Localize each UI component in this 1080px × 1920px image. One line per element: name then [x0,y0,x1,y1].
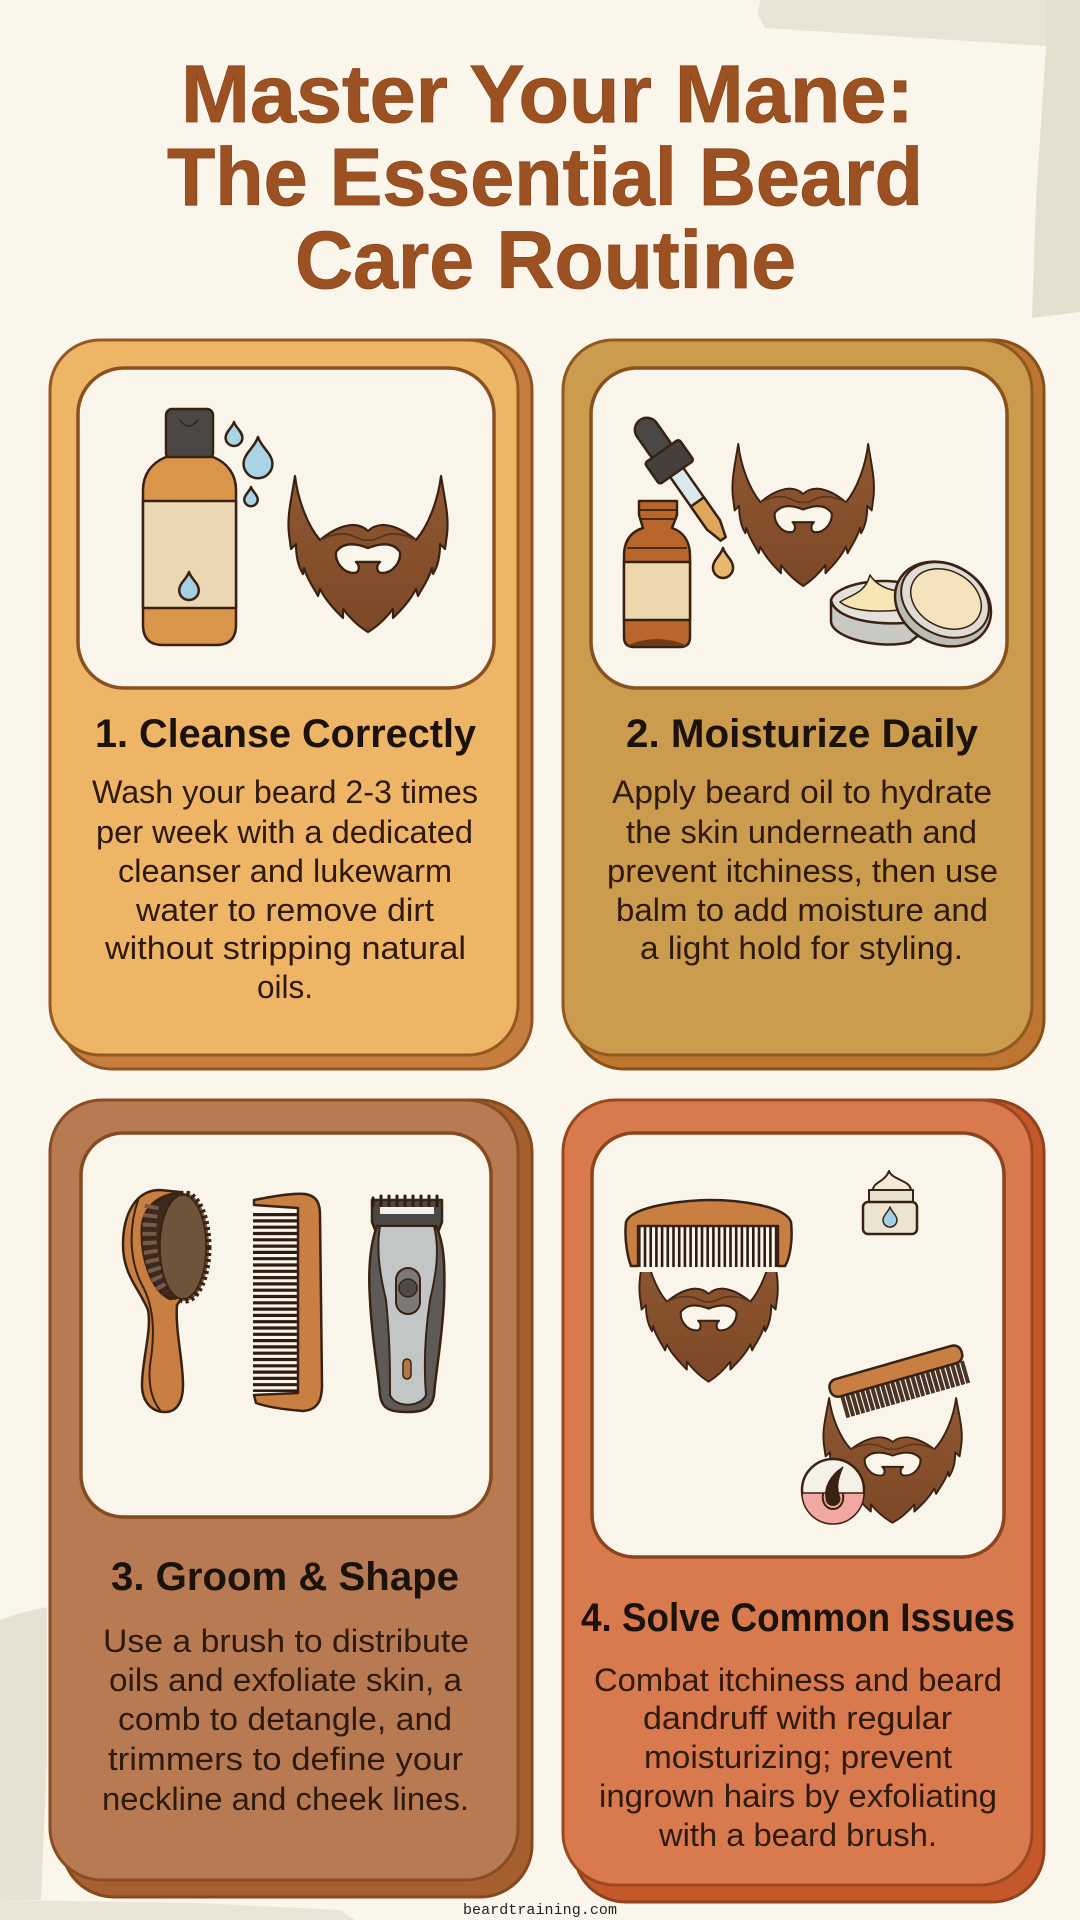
panel: 3 Groom and Shape [50,1100,532,1897]
title: Care Routine [295,215,796,306]
footer source: beardtraining.com [463,1902,617,1919]
title [167,49,923,306]
icon: water drops [226,422,272,506]
card 2 body text: the skin underneath and [626,814,977,850]
card 4 body text: Combat itchiness and beard [594,1662,1002,1698]
card 1 body text: oils. [257,969,313,1005]
card 2 body text [607,774,998,966]
card 3 body text [102,1623,469,1817]
card 1 body text: without stripping natural [104,930,466,966]
icon: trimmer [369,1196,444,1412]
icon: beard [288,476,448,632]
card 1 body text: water to remove dirt [135,892,434,928]
icon: beard with brush [823,1398,962,1523]
card 2 body text: balm to add moisture and [616,892,988,928]
card 3 body text: neckline and cheek lines. [102,1781,469,1817]
card 1 background [50,340,532,1069]
title: Master Your Mane: [181,49,914,140]
card 2 body text: a light hold for styling. [640,930,963,966]
icon: hair follicle badge [802,1459,864,1524]
card 2 illustration panel [591,368,1007,688]
card 1 body text: per week with a dedicated [96,814,473,850]
card 3 body text: oils and exfoliate skin, a [109,1662,462,1698]
panel: 2 Moisturize Daily [563,340,1044,1069]
decorative tape: top right [758,0,1080,318]
card 2 body text: prevent itchiness, then use [607,853,998,889]
icon: beard brush [828,1343,968,1409]
card 2 background [563,340,1044,1069]
icon: dropper [623,408,740,551]
card 4 body text: ingrown hairs by exfoliating [599,1778,997,1814]
panel: 1 Cleanse Correctly [50,340,532,1069]
card 1 body text [92,774,478,1005]
card 3 body text: comb to detangle, and [118,1701,452,1737]
icon: balm tin [831,545,1006,663]
card 2 body text: Apply beard oil to hydrate [612,774,992,810]
card 3 background [50,1100,532,1897]
card 1 body text: cleanser and lukewarm [118,853,452,889]
icon: comb [625,1200,792,1266]
card 2 heading: 2. Moisturize Daily [626,712,979,756]
icon: beard brush [123,1190,209,1412]
icon: beard under comb [636,1240,781,1382]
title: The Essential Beard [167,132,923,223]
card 4 body text [594,1662,1002,1853]
icon: beard [732,444,874,586]
card 3 illustration panel [81,1133,491,1517]
icon: oil bottle [624,501,690,647]
icon: shampoo bottle [143,409,236,645]
icon: oil drop [713,548,733,578]
card 1 body text: Wash your beard 2-3 times [92,774,478,810]
card 3 body text: trimmers to define your [108,1741,463,1777]
card 4 background [563,1100,1044,1902]
card 4 body text: dandruff with regular [643,1700,952,1736]
card 3 body text: Use a brush to distribute [103,1623,469,1659]
card 4 body text: with a beard brush. [658,1817,937,1853]
card 1 illustration panel [78,368,494,688]
card 4 body text: moisturizing; prevent [644,1739,952,1775]
card 4 heading: 4. Solve Common Issues [581,1596,1015,1640]
panel: 4 Solve Common Issues [563,1100,1044,1902]
decorative tape: bottom left [0,1607,355,1920]
card 1 heading: 1. Cleanse Correctly [95,712,477,756]
icon: wooden comb [254,1194,322,1411]
icon: cream jar [863,1171,917,1234]
card 3 heading: 3. Groom & Shape [111,1555,459,1599]
card 4 illustration panel [592,1133,1004,1557]
